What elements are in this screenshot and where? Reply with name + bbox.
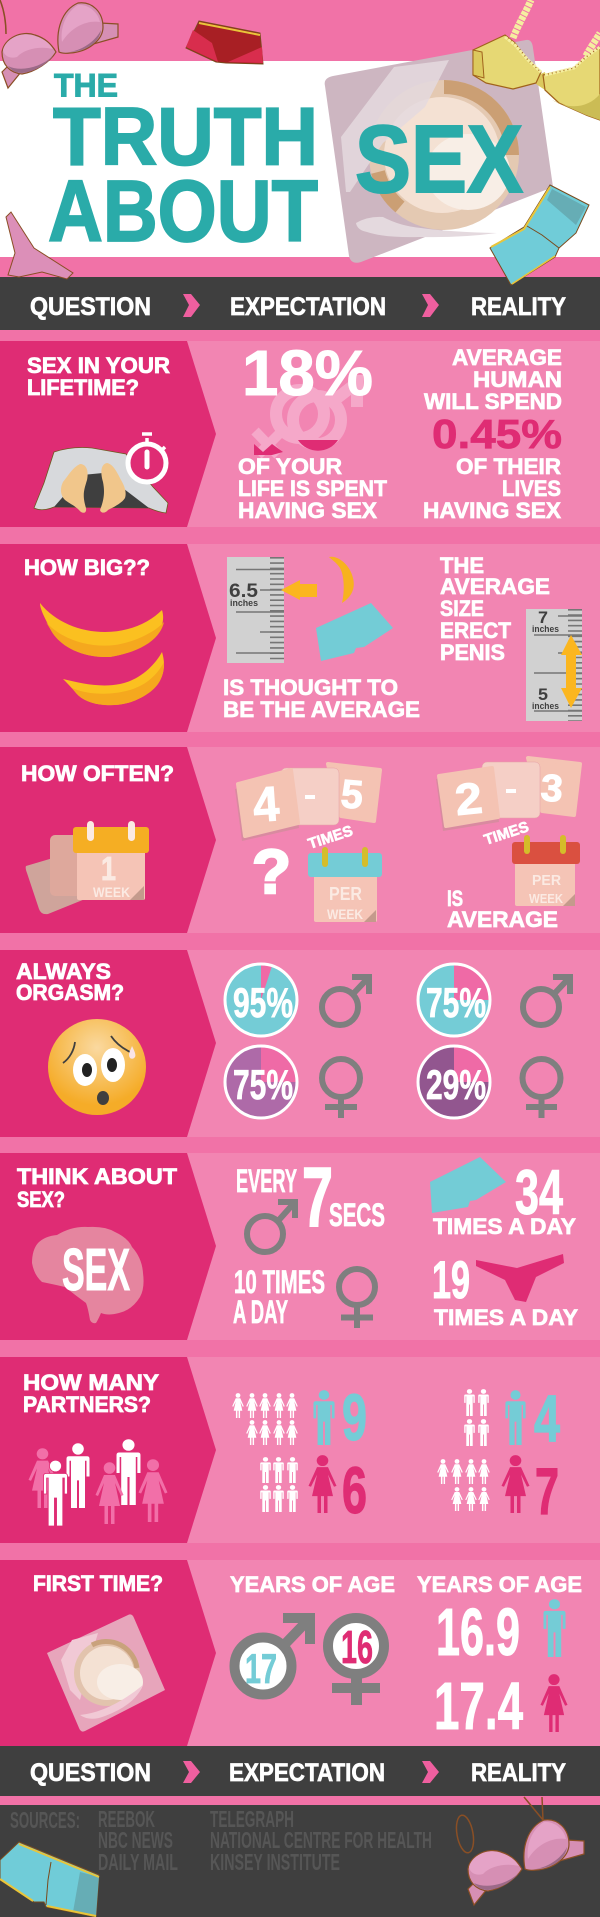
- sources text: REEBOK: [98, 1806, 155, 1832]
- heading: ORGASM?: [16, 980, 124, 1005]
- icon: female symbol: [322, 1059, 360, 1118]
- question tab: [0, 950, 216, 1137]
- panel: first time: [0, 1560, 600, 1746]
- expectation: women six partners: 6: [342, 1453, 367, 1527]
- top column headers bar: [0, 277, 600, 330]
- label: expectation: EXPECTATION: [229, 1759, 385, 1787]
- icon: blue briefs: [316, 603, 393, 661]
- reality: female 19 times a day: 19: [432, 1251, 470, 1310]
- stat: male 17: 17: [245, 1645, 277, 1692]
- reality: female 19 times a day: [432, 1251, 578, 1330]
- icon: number cards 2 to 3: 3: [539, 767, 564, 811]
- reality: women seven partners: 7: [535, 1454, 559, 1528]
- expectation: male every 7 secs: EVERY: [236, 1163, 297, 1199]
- icon: calendar per week reality: [512, 835, 580, 906]
- heading: SEX IN YOUR: [27, 353, 170, 378]
- icon: ruler 6.5 inches: inches: [230, 598, 258, 608]
- icon: number cards 4 to 5: 5: [339, 772, 365, 818]
- reality text: AVERAGE: [440, 574, 550, 599]
- chart: male expectation 95 percent: [225, 964, 297, 1036]
- icon: number cards 2 to 3: [436, 758, 580, 831]
- label: reality: REALITY: [471, 1759, 566, 1787]
- icon: calendar one week: 1: [101, 850, 116, 887]
- expectation: male every 7 secs: 7: [302, 1150, 333, 1244]
- expectation text: LIFE IS SPENT: [238, 476, 388, 501]
- stat: male 16.9: 16.9: [436, 1595, 520, 1670]
- reality text: [423, 345, 562, 523]
- expectation: women six partners: [260, 1453, 367, 1527]
- stat: female 16: [328, 1618, 384, 1705]
- expectation text: BE THE AVERAGE: [223, 697, 420, 722]
- header panel: [0, 0, 600, 285]
- icon: calendar one week: WEEK: [93, 884, 130, 900]
- icon: worried emoji: [48, 1019, 146, 1115]
- label: times: TIMES: [306, 822, 355, 853]
- icon: number cards 4 to 5: [235, 764, 380, 841]
- panel: always orgasm: [0, 950, 600, 1137]
- label: reality: REALITY: [471, 293, 566, 321]
- reality text: LIVES: [502, 476, 561, 501]
- icon: brain with sex: [32, 1227, 144, 1323]
- panel: how big: [0, 544, 600, 732]
- reality text: [447, 886, 558, 932]
- icon: male symbol: [322, 977, 369, 1025]
- icon: red briefs: [186, 21, 263, 64]
- stat: female 16: 16: [341, 1621, 373, 1673]
- icon: blue briefs: [0, 1842, 99, 1917]
- sources text: DAILY MAIL: [98, 1849, 178, 1875]
- sources text: NBC NEWS: [98, 1827, 173, 1853]
- reality text: WILL SPEND: [424, 389, 562, 414]
- expectation text: IS THOUGHT TO: [223, 675, 398, 700]
- icon: ruler 5 to 7 inches: 7: [538, 608, 548, 627]
- reality text: [440, 553, 550, 665]
- reality text: HUMAN: [473, 367, 562, 392]
- icon: pink bra: [454, 1797, 584, 1905]
- icon: big banana: [40, 603, 164, 657]
- icon: ruler 5 to 7 inches: 5: [538, 685, 548, 704]
- sources text: KINSEY INSTITUTE: [210, 1849, 340, 1875]
- reality: male 34 times a day: 34: [515, 1158, 563, 1228]
- icon: calendar per week: WEEK: [327, 906, 363, 922]
- reality text: PENIS: [440, 640, 505, 665]
- icon: calendar per week: PER: [329, 884, 362, 904]
- question tab: [0, 1153, 216, 1340]
- heading: [17, 1164, 178, 1212]
- expectation: female 10 times a day: A DAY: [233, 1294, 288, 1330]
- question tab: [0, 1357, 216, 1543]
- icon: ruler 6.5 inches: [227, 557, 284, 663]
- icon: calendar per week reality: PER: [532, 872, 561, 889]
- reality text: AVERAGE: [447, 907, 558, 932]
- expectation text: [238, 454, 388, 523]
- label: question: QUESTION: [30, 1759, 151, 1787]
- arrow: [183, 294, 200, 317]
- panel: how often: [0, 747, 600, 933]
- expectation: men nine partners: 9: [342, 1380, 367, 1454]
- reality label: YEARS OF AGE: [417, 1572, 582, 1597]
- chart: female reality 29 percent: [418, 1046, 490, 1118]
- icon: yellow bra: [473, 0, 600, 120]
- icon: group of people: [28, 1439, 167, 1526]
- expectation text: HAVING SEX: [238, 498, 377, 523]
- reality text: THE: [440, 553, 484, 578]
- expectation: female 10 times a day: 10 TIMES: [234, 1264, 325, 1300]
- title: sex: SEX: [355, 106, 523, 213]
- icon: ruler 5 to 7 inches: [526, 608, 582, 721]
- title: the truth about: ABOUT: [48, 163, 318, 260]
- heading: FIRST TIME?: [33, 1571, 163, 1596]
- expectation: female 10 times a day: [233, 1264, 375, 1330]
- icon: male symbol: [523, 977, 570, 1025]
- reality: female 19 times a day: TIMES A DAY: [434, 1305, 578, 1330]
- label: times: TIMES: [482, 818, 531, 849]
- chart: female expectation 75 percent: [225, 1046, 297, 1118]
- icon: number cards 4 to 5: 4: [251, 777, 281, 833]
- question tab: [0, 1560, 216, 1746]
- icon: female symbol: [522, 1059, 560, 1118]
- title: the truth about: THE: [54, 68, 118, 104]
- icon: ruler 5 to 7 inches: inches: [532, 701, 559, 711]
- icon: condom packet: [47, 1614, 165, 1732]
- icon: feet under sheet: [34, 448, 168, 513]
- panel: sex in your lifetime: [0, 337, 600, 527]
- heading: HOW OFTEN?: [21, 761, 174, 786]
- icon: interlocked gender symbols: [254, 375, 358, 455]
- footer: [0, 1797, 600, 1917]
- chart: male reality 75 percent: [418, 964, 490, 1036]
- reality: men four partners: 4: [534, 1381, 560, 1455]
- heading: HOW BIG??: [24, 555, 150, 580]
- icon: calendar per week: [308, 847, 382, 922]
- reality text: AVERAGE: [452, 345, 562, 370]
- icon: question mark: ?: [252, 838, 291, 907]
- arrow: [281, 580, 317, 600]
- arrow: [422, 294, 439, 317]
- arrow: [422, 1761, 439, 1783]
- expectation: male every 7 secs: [236, 1150, 385, 1252]
- reality: male 34 times a day: TIMES A DAY: [433, 1214, 576, 1239]
- chart: male reality 75 percent: 75%: [426, 979, 486, 1026]
- white title band: [0, 61, 600, 257]
- question tab: [0, 544, 216, 732]
- question tab: [0, 747, 216, 933]
- chart: female reality 29 percent: 29%: [426, 1061, 486, 1108]
- chart: male expectation 95 percent: 95%: [233, 979, 293, 1026]
- reality: women seven partners: [437, 1454, 559, 1528]
- heading: LIFETIME?: [27, 375, 139, 400]
- icon: ruler 6.5 inches: 6.5: [229, 581, 258, 602]
- icon: brain with sex: SEX: [62, 1237, 130, 1303]
- sources text: [10, 1806, 432, 1875]
- icon: pink bra: [0, 0, 118, 88]
- icon: calendar one week: [26, 821, 149, 914]
- heading: HOW MANY: [23, 1370, 159, 1395]
- chart: female expectation 75 percent: 75%: [233, 1061, 293, 1108]
- heading: THINK ABOUT: [17, 1164, 178, 1189]
- label: expectation: EXPECTATION: [230, 293, 386, 321]
- heading: [16, 959, 124, 1005]
- sources text: NATIONAL CENTRE FOR HEALTH: [210, 1827, 432, 1853]
- bottom column headers bar: [0, 1746, 600, 1796]
- heading: PARTNERS?: [23, 1392, 151, 1417]
- sources text: TELEGRAPH: [210, 1806, 294, 1832]
- icon: small banana: [329, 557, 354, 603]
- icon: second banana: [63, 652, 164, 705]
- expectation label: YEARS OF AGE: [230, 1572, 395, 1597]
- expectation text: OF YOUR: [238, 454, 342, 479]
- icon: pink thong: [6, 212, 73, 279]
- title: the truth about: [48, 68, 318, 260]
- icon: number cards 2 to 3: 2: [453, 774, 485, 825]
- stat: male 17: [234, 1613, 315, 1694]
- question tab: [0, 341, 216, 527]
- arrow: [183, 1761, 200, 1783]
- stat: 18 percent: 18%: [242, 337, 373, 409]
- title: the truth about: TRUTH: [53, 92, 318, 182]
- panel: think about sex: [0, 1150, 600, 1340]
- reality text: IS: [447, 886, 463, 911]
- heading: [23, 1370, 159, 1417]
- reality: men four partners: [464, 1381, 560, 1455]
- heading: [27, 353, 170, 400]
- stat: female 17.4: 17.4: [434, 1669, 523, 1744]
- icon: stopwatch: [128, 434, 166, 482]
- icon: ruler 5 to 7 inches: inches: [532, 624, 559, 634]
- icon: blue briefs: [490, 185, 589, 285]
- heading: SEX?: [17, 1187, 65, 1212]
- reality text: ERECT: [440, 618, 512, 643]
- reality: male 34 times a day: [430, 1157, 576, 1239]
- expectation: men nine partners: [232, 1380, 367, 1454]
- icon: condom packet: [325, 40, 553, 263]
- stat: 0.45 percent: 0.45%: [432, 411, 562, 457]
- sources text: SOURCES:: [10, 1807, 80, 1833]
- heading: ALWAYS: [16, 959, 111, 984]
- expectation text: [223, 675, 420, 722]
- reality text: HAVING SEX: [423, 498, 561, 523]
- reality text: SIZE: [440, 596, 484, 621]
- reality text: OF THEIR: [456, 454, 561, 479]
- icon: calendar per week reality: WEEK: [529, 891, 564, 906]
- expectation: male every 7 secs: SECS: [329, 1197, 385, 1233]
- panel: how many partners: [0, 1357, 600, 1543]
- label: question: QUESTION: [30, 293, 151, 321]
- arrow: double-headed: [561, 635, 582, 708]
